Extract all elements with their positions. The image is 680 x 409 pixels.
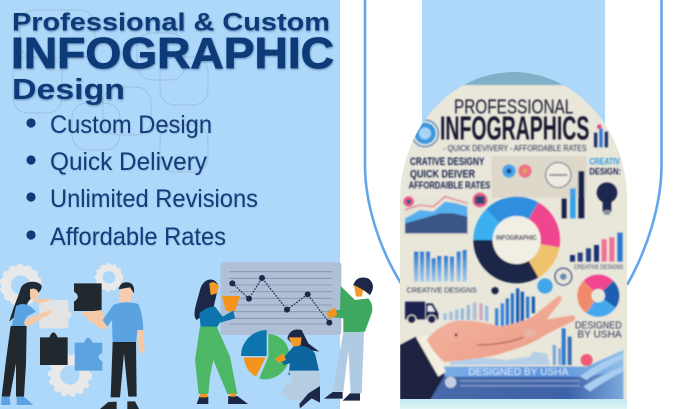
label: DESIGNED: DESIGNED — [575, 320, 622, 331]
figure: crouching woman — [275, 329, 320, 408]
poster: arch infographic — [400, 70, 627, 400]
bullet list — [26, 111, 258, 251]
poster icons: small badges — [491, 268, 593, 366]
heading line: Professional & Custom: Professional & Custom — [12, 8, 330, 36]
poster chart: three bars — [562, 171, 584, 218]
poster chart: central donut — [472, 196, 561, 284]
icon: puzzle pieces — [39, 283, 102, 371]
label: BY USHA: BY USHA — [577, 330, 622, 341]
label: CREATIV: CREATIV — [589, 156, 620, 166]
illustration: team analysing charts — [195, 262, 373, 408]
figure: man pointing at chart — [324, 277, 373, 401]
poster subtitle: - QUICK DEVIVERY - AFFORDABLE RATES — [443, 143, 587, 153]
poster panel: middle tinted block — [492, 156, 587, 198]
donut center label: INFOGRAPHIC — [496, 233, 537, 242]
poster text: CREATIVE DESIGNS right: CREATIVE DESIGNS — [574, 265, 623, 271]
poster chart: area chart — [403, 197, 468, 237]
list item: Custom Design: Custom Design — [50, 111, 212, 139]
label: DESIGN: DESIGN: — [589, 166, 621, 176]
poster footer band — [430, 350, 624, 399]
list item: Affordable Rates: Affordable Rates — [50, 223, 226, 251]
heading line: INFOGRAPHIC: INFOGRAPHIC — [11, 29, 334, 78]
illustration: team assembling puzzle — [1, 265, 145, 409]
poster icons: circles — [502, 162, 571, 188]
poster chart: bars lower left — [414, 250, 467, 282]
poster headline — [440, 96, 589, 153]
chart: pie — [241, 330, 289, 379]
poster left list — [409, 156, 490, 192]
poster icon: delivery truck — [405, 302, 438, 324]
poster text: DESIGNED BY USHA right — [575, 320, 622, 341]
list: CRATIVE DESIGNY: CRATIVE DESIGNY — [410, 156, 485, 168]
list item: Unlimited Revisions: Unlimited Revisions — [50, 185, 258, 213]
heading — [11, 8, 334, 106]
heading line: Design: Design — [12, 74, 125, 106]
panel: left blue background — [0, 0, 340, 409]
poster lower right bars — [553, 328, 572, 365]
poster chart: rising bars behind hand — [443, 288, 535, 327]
poster text: CREATIVE DESIGNS left: CREATIVE DESIGNS — [407, 285, 477, 294]
poster top band — [462, 72, 564, 86]
chart: line chart board — [221, 262, 341, 335]
strip below poster — [400, 398, 627, 409]
poster text: creative designs — [589, 156, 621, 176]
outline: blue frame curve — [365, 0, 662, 285]
figure: woman with funnel — [195, 280, 248, 404]
list: AFFORDAIBLE RATES: AFFORDAIBLE RATES — [409, 181, 490, 192]
panel: pale blue column — [422, 0, 605, 200]
figure: woman pointing — [1, 282, 52, 405]
figure: man holding puzzle piece — [80, 282, 145, 409]
poster icon: radar circle — [412, 120, 438, 147]
list item: Quick Delivery: Quick Delivery — [50, 148, 207, 176]
poster illustration: open hand — [427, 296, 575, 362]
icon: gears — [2, 265, 122, 395]
poster title: PROFESSIONAL: PROFESSIONAL — [454, 96, 573, 118]
poster icons: pink rings — [403, 193, 487, 207]
poster illustration: sleeve — [400, 337, 445, 400]
footer label: DESIGNED BY USHA: DESIGNED BY USHA — [468, 367, 569, 378]
poster skyline — [450, 352, 550, 365]
poster icon: light bulb — [597, 182, 617, 215]
poster illustration: shirt cuff — [416, 335, 446, 377]
poster chart: bars right — [570, 233, 623, 262]
list: QUICK DEIVER: QUICK DEIVER — [410, 169, 475, 181]
poster chart: small bars top right — [594, 124, 608, 147]
background outline squares — [13, 10, 208, 172]
poster chart: ring pie — [579, 276, 618, 315]
